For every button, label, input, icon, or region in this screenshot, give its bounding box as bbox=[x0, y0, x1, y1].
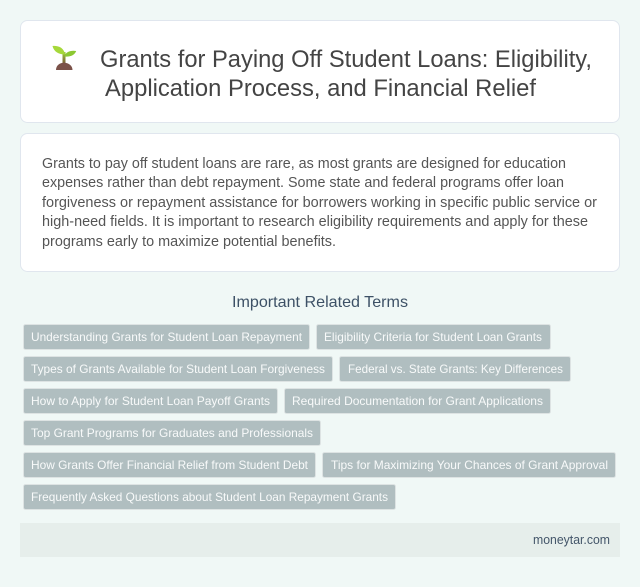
title: Grants for Paying Off Student Loans: Eligibility, bbox=[100, 46, 592, 73]
tag: How Grants Offer Financial Relief from Student Debt bbox=[31, 458, 309, 472]
tag: Frequently Asked Questions about Student Loan Repayment Grants bbox=[31, 490, 388, 504]
footer bar bbox=[20, 523, 620, 557]
tag bbox=[24, 388, 278, 414]
footer source: moneytar.com bbox=[533, 533, 610, 547]
tag: Types of Grants Available for Student Loan Forgiveness bbox=[31, 362, 325, 376]
tag: Top Grant Programs for Graduates and Professionals bbox=[31, 426, 313, 440]
text block: summary: Grants to pay off student loans are rare, as most grants are designed for education bbox=[42, 156, 566, 172]
text block: summary: programs early to maximize potential benefits. bbox=[42, 234, 336, 250]
text block: summary: expenses rather than debt repayment. Some state and federal programs offer loan bbox=[42, 175, 564, 191]
tag: Understanding Grants for Student Loan Repayment bbox=[31, 330, 303, 344]
tag bbox=[24, 324, 310, 350]
text block: summary: forgiveness or repayment assistance for borrowers working in specific public service or bbox=[42, 195, 597, 211]
tag bbox=[322, 452, 616, 478]
title: Application Process, and Financial Relief bbox=[105, 75, 536, 102]
text block: summary: high-need fields. It is important to research eligibility requirements and apply for these bbox=[42, 214, 588, 230]
tag bbox=[24, 484, 396, 510]
tag: Federal vs. State Grants: Key Differences bbox=[348, 362, 563, 376]
panel: title card bbox=[20, 20, 620, 122]
tag bbox=[340, 356, 570, 382]
icon: seedling bbox=[52, 46, 76, 70]
tag bbox=[24, 356, 332, 382]
panel: summary card bbox=[20, 134, 620, 272]
title bbox=[100, 46, 592, 102]
tag: Required Documentation for Grant Applications bbox=[292, 394, 543, 408]
tag: Tips for Maximizing Your Chances of Grant Approval bbox=[331, 458, 608, 472]
tag bbox=[316, 324, 550, 350]
tag bbox=[284, 388, 550, 414]
tag list bbox=[24, 324, 616, 510]
tag: Eligibility Criteria for Student Loan Grants bbox=[324, 330, 542, 344]
tag: How to Apply for Student Loan Payoff Grants bbox=[31, 394, 270, 408]
text block: summary bbox=[42, 156, 597, 250]
heading: related terms: Important Related Terms bbox=[232, 294, 408, 311]
tag bbox=[24, 452, 316, 478]
tag bbox=[24, 420, 320, 446]
